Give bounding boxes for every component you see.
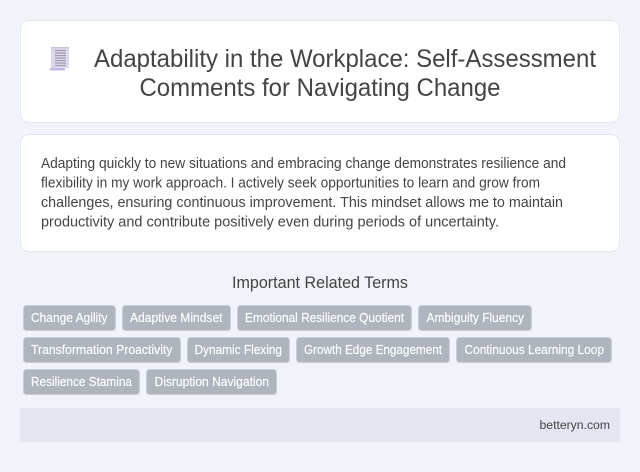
summary text: productivity and contribute positively even during periods of uncertainty.	[41, 214, 499, 230]
title: Adaptability in the Workplace: Self-Assessment	[94, 46, 596, 73]
summary text: flexibility in my work approach. I actively seek opportunities to learn and grow from	[41, 176, 540, 192]
tag: Transformation Proactivity	[24, 338, 180, 362]
heading: related terms: Important Related Terms	[232, 274, 408, 292]
tag: Continuous Learning Loop	[456, 338, 612, 362]
tag: Emotional Resilience Quotient	[238, 306, 412, 330]
icon: document scroll	[50, 47, 69, 70]
footer source: betteryn.com	[540, 418, 610, 432]
summary text: challenges, ensuring continuous improvement. This mindset allows me to maintain	[41, 195, 563, 211]
tag: Continuous Learning Loop: Continuous Learning Loop	[464, 343, 604, 357]
tag: Growth Edge Engagement	[296, 338, 450, 362]
tag: Disruption Navigation	[146, 370, 276, 394]
tag: Ambiguity Fluency	[418, 306, 532, 330]
title: Comments for Navigating Change	[140, 75, 500, 102]
panel: title card	[20, 20, 620, 122]
panel: summary card	[20, 134, 620, 252]
tag: Dynamic Flexing	[188, 338, 290, 362]
tag list	[24, 306, 612, 394]
tag: Resilience Stamina: Resilience Stamina	[31, 375, 132, 389]
tag: Disruption Navigation: Disruption Navigation	[154, 375, 269, 389]
tag: Change Agility	[24, 306, 116, 330]
tag: Transformation Proactivity: Transformation Proactivity	[31, 343, 173, 357]
tag: Adaptive Mindset: Adaptive Mindset	[130, 311, 223, 325]
title	[94, 46, 596, 102]
tag: Dynamic Flexing: Dynamic Flexing	[194, 343, 282, 357]
footer bar	[20, 408, 620, 442]
summary text: Adapting quickly to new situations and embracing change demonstrates resilience and	[41, 156, 566, 172]
tag: Emotional Resilience Quotient: Emotional Resilience Quotient	[245, 311, 404, 325]
summary text	[41, 156, 566, 230]
tag: Growth Edge Engagement: Growth Edge Engagement	[304, 343, 442, 357]
tag: Resilience Stamina	[24, 370, 140, 394]
tag: Ambiguity Fluency: Ambiguity Fluency	[426, 311, 525, 325]
tag: Adaptive Mindset	[122, 306, 230, 330]
tag: Change Agility: Change Agility	[31, 311, 108, 325]
